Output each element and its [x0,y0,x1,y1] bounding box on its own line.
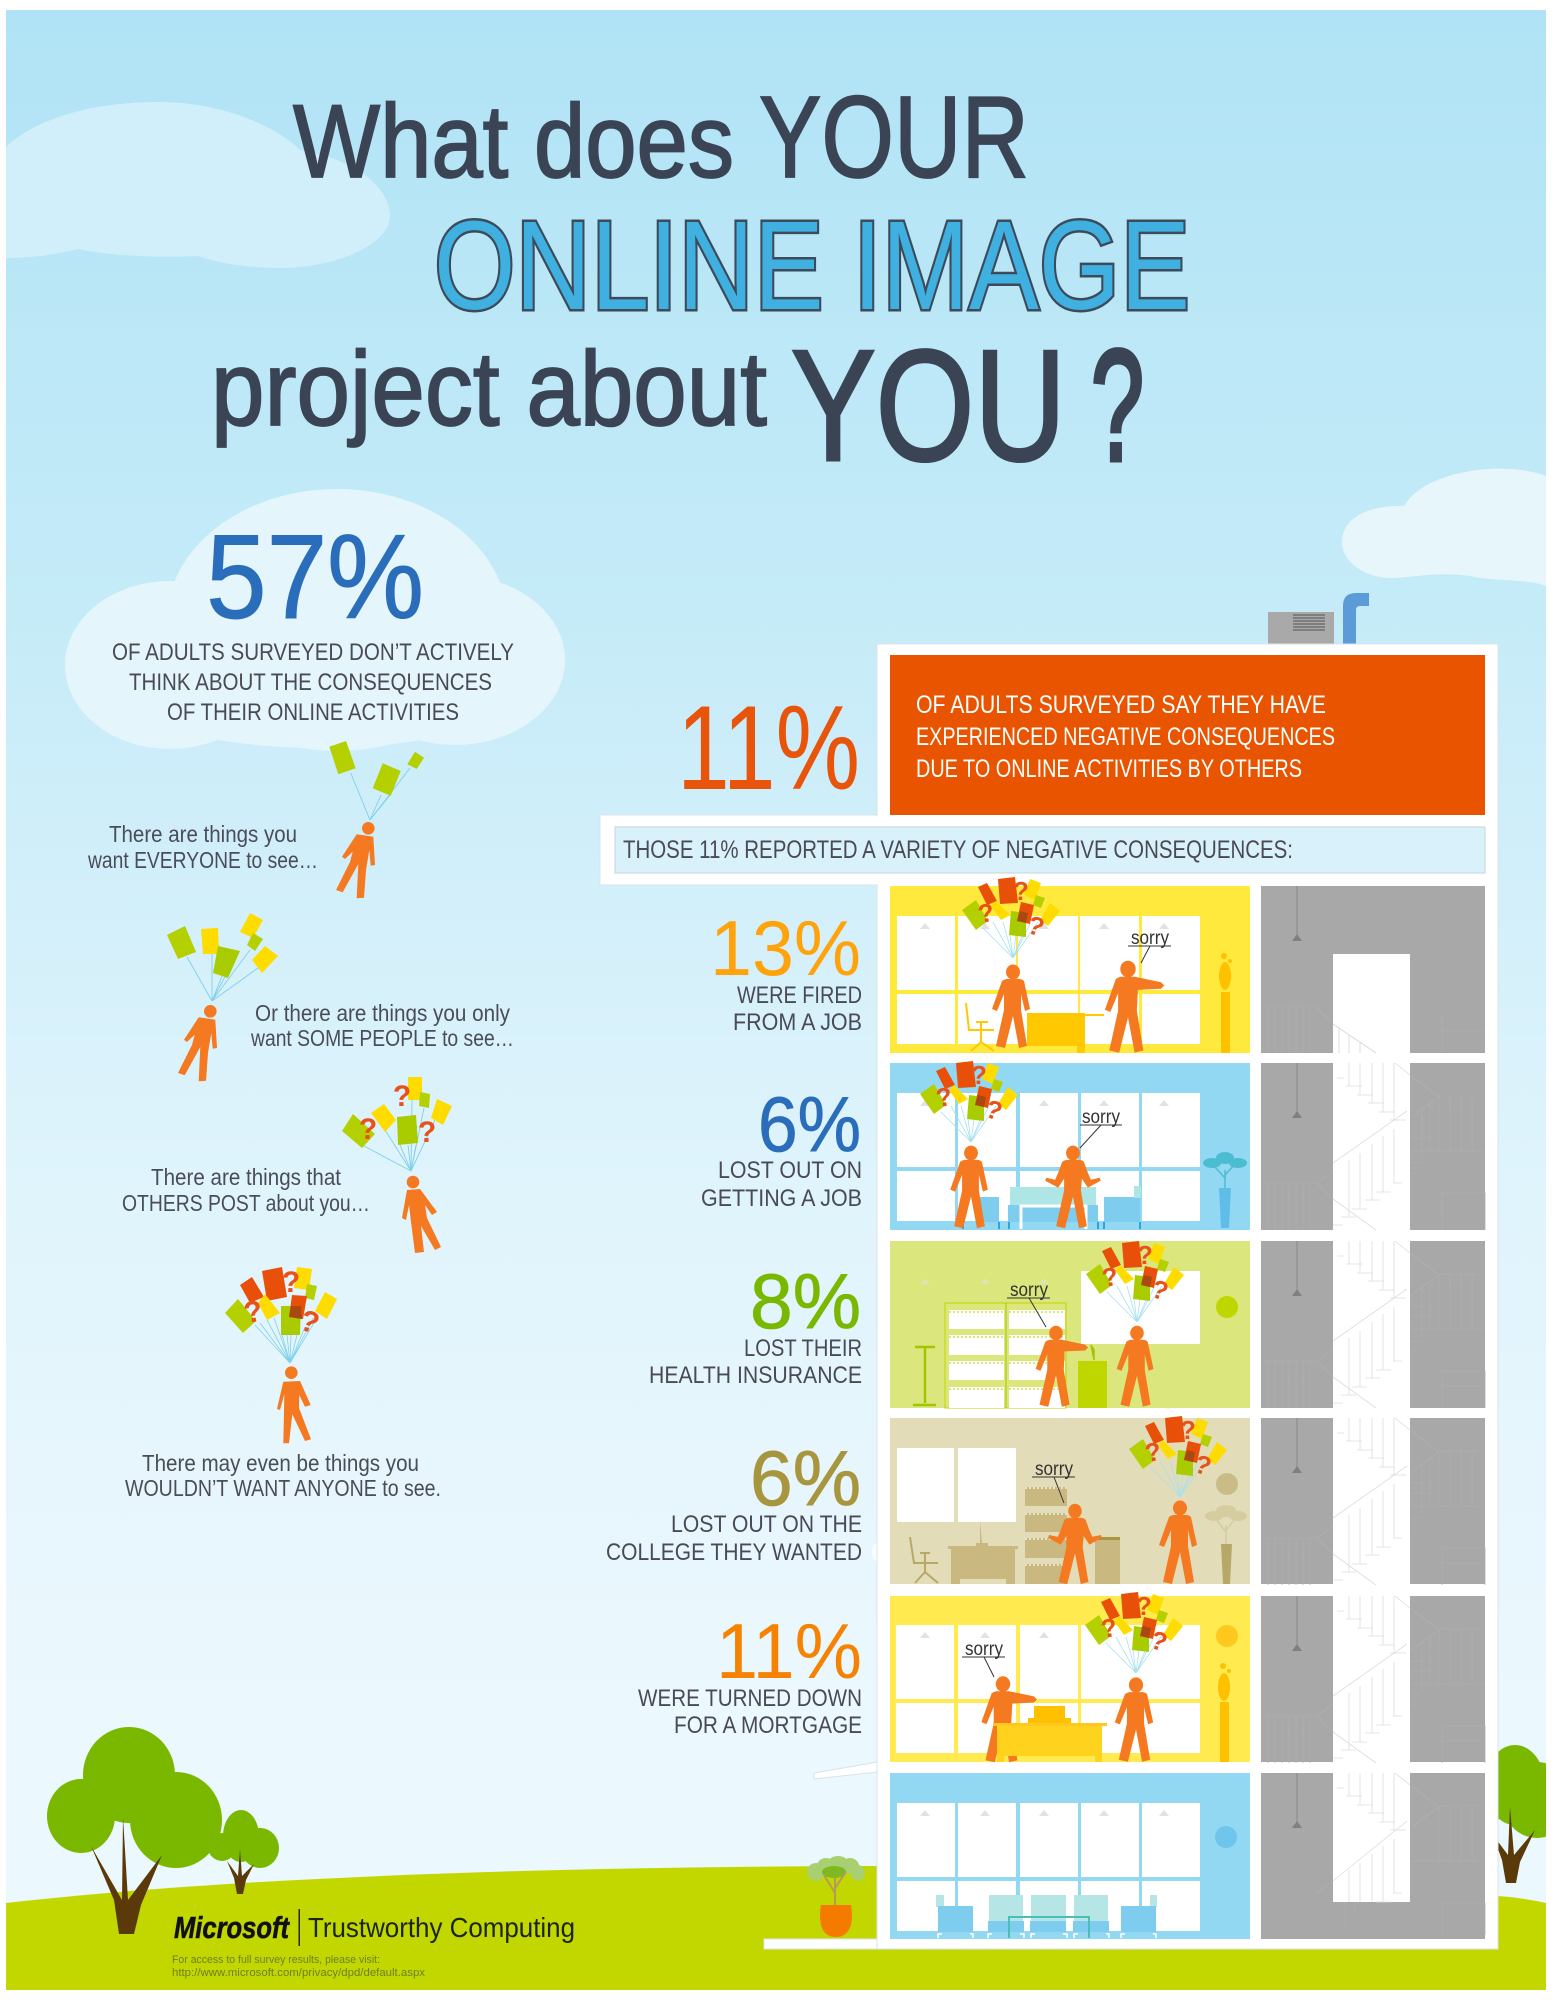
stat: 8% insurance: 8% [750,1257,861,1345]
stair floor 2 [1261,1063,1485,1230]
lounge furniture [963,1186,1141,1229]
stat: 11% mortgage [638,1607,862,1739]
room 1: fired [890,876,1250,1053]
cloud shape [65,489,565,751]
stat: 11% mortgage: 11% [716,1607,862,1695]
title: ONLINE IMAGE [434,195,1190,336]
cloud: top right [1342,469,1546,586]
room 5: mortgage [890,1591,1250,1762]
desk [1027,1013,1104,1053]
person shrugging [1045,1146,1101,1228]
text: others post: There are things that [151,1164,342,1190]
person looking [1117,1326,1153,1407]
stat: 8% insurance: HEALTH INSURANCE [649,1362,862,1389]
balloons of things: ? [1191,1448,1215,1482]
person pointing [981,1676,1037,1762]
banner: variety of consequences [615,827,1485,873]
text: everyone [87,821,318,873]
stat: 6% college [606,1434,862,1566]
desk and monitor [993,1706,1107,1762]
text: nobody [125,1450,441,1501]
title: What does [293,84,734,200]
stat: 8% insurance: LOST THEIR [744,1335,862,1362]
panel: 57% cloud [65,489,565,751]
balloons of things: ? [934,1081,954,1113]
balloons of things [1086,1240,1184,1322]
balloons of things: ? [1100,1261,1120,1293]
figure 4: nobody: ? [241,1295,265,1330]
stair floor 3 [1261,1241,1485,1408]
title: project about [211,330,767,448]
stair floor 4 [1261,1418,1485,1585]
text: others post: OTHERS POST about you… [122,1190,370,1216]
stat: 13% fired: FROM A JOB [733,1009,862,1036]
plant [1205,1505,1247,1584]
logo: Microsoft Trustworthy Computing: Microsoft [174,1910,290,1945]
cloud caption: OF ADULTS SURVEYED DON’T ACTIVELY [112,639,514,666]
heading panel: 11% [677,655,1485,815]
balloons of things: ? [1148,1273,1172,1307]
cube and plant [1078,1345,1107,1408]
stat: 11% mortgage: WERE TURNED DOWN [638,1685,862,1712]
person shrugging [1048,1504,1102,1584]
balloons of things: ? [971,1060,987,1090]
chair [910,1537,938,1583]
fine print: http://www.microsoft.com/privacy/dpd/default.aspx [172,1967,426,1979]
wall clock [1216,1296,1238,1318]
balloons of things: ? [1180,1415,1196,1445]
rooftop equipment [1268,593,1369,645]
text: others post [122,1164,370,1216]
room 2: job [890,1060,1250,1230]
orange callout [890,655,1485,815]
balloons of things: ? [1024,909,1048,943]
balloons of things: ? [1147,1624,1171,1658]
potted plant [807,1856,865,1937]
cloud caption: THINK ABOUT THE CONSEQUENCES [129,669,492,696]
cloud: top left [6,102,390,268]
big tree [47,1727,222,1934]
figure 3: others post: ? [393,1080,411,1113]
callout text [916,691,1335,783]
figure 3: others post: ? [418,1116,436,1149]
callout text: DUE TO ONLINE ACTIVITIES BY OTHERS [916,755,1302,783]
balloons of things: ? [1137,1240,1153,1270]
callout text: OF ADULTS SURVEYED SAY THEY HAVE [916,691,1326,719]
balloons of things: ? [1013,876,1029,906]
person looking [992,964,1030,1048]
logo: Microsoft Trustworthy Computing [174,1909,575,1946]
shelves [1025,1487,1067,1584]
room 3: insurance [890,1240,1250,1408]
text: nobody: There may even be things you [142,1450,419,1476]
person pointing [1105,961,1164,1053]
text: some people: Or there are things you only [255,1000,510,1026]
sorry label [962,1639,1005,1677]
stat: 6% college: COLLEGE THEY WANTED [606,1539,862,1566]
balloons of things [1085,1591,1183,1673]
cloud caption: OF THEIR ONLINE ACTIVITIES [167,699,459,726]
building shell [600,644,1498,1949]
figure 4: nobody: ? [282,1266,300,1299]
stat: 6% college: LOST OUT ON THE [671,1511,862,1538]
wall clock [1216,1625,1238,1647]
floor lamp [913,1347,936,1405]
stat: 6% job: LOST OUT ON [718,1157,862,1184]
stat: 13% fired: WERE FIRED [737,982,862,1009]
title: ? [1091,318,1144,494]
balloons of things: ? [1099,1612,1119,1644]
callout text: EXPERIENCED NEGATIVE CONSEQUENCES [916,723,1335,751]
balloons of things: ? [1136,1591,1152,1621]
person pointing [1036,1326,1088,1407]
sorry label: sorry [1082,1107,1120,1128]
stat: 6% job: GETTING A JOB [701,1185,862,1212]
stat: 6% job [701,1080,862,1212]
person looking [1159,1500,1197,1584]
person looking [1115,1677,1153,1762]
ground hill [6,1866,1546,1990]
logo: Microsoft Trustworthy Computing: Trustworthy Computing [308,1912,575,1943]
wall clock [1215,1826,1237,1848]
room 4: college [890,1415,1250,1584]
figure 4: nobody [225,1266,337,1443]
balloons of things [1129,1415,1227,1497]
text: everyone: want EVERYONE to see… [87,847,318,873]
banner: variety of consequences: THOSE 11% REPORTED A VARIETY OF NEGATIVE CONSEQUENCES: [623,836,1293,864]
right tree [1498,1745,1546,1883]
figure 2: some people [167,913,278,1081]
person looking [950,1146,988,1228]
stair floor 5 [1261,1596,1485,1763]
vase [1219,953,1232,1053]
stat: 13% fired [710,904,862,1036]
desk [948,1520,1018,1584]
figure 4: nobody: ? [296,1304,323,1341]
statistic 11%: 11% [677,681,860,815]
balloons of things [962,876,1060,958]
faint white spot [872,1539,898,1565]
stat: 13% fired: 13% [710,904,861,992]
room 6: empty lounge [890,1773,1250,1939]
wall clock [1216,1473,1238,1495]
fine print [172,1954,426,1979]
stair floor 1 [1261,886,1485,1053]
stat: 11% mortgage: FOR A MORTGAGE [674,1712,862,1739]
stair floor 6 [1261,1773,1485,1939]
sorry label: sorry [965,1639,1003,1660]
balloons of things [920,1060,1018,1142]
title [211,72,1190,494]
text: nobody: WOULDN’T WANT ANYONE to see. [125,1475,441,1501]
sorry label [1032,1459,1075,1503]
stairwell column [1261,886,1485,1939]
statistic 57%: 57% [206,510,424,644]
lounge seats [936,1895,1157,1938]
small tree [208,1810,279,1894]
balloons of things: ? [1143,1436,1163,1468]
stat: 6% college: 6% [750,1434,861,1522]
cabinet [1093,1537,1120,1584]
fine print: For access to full survey results, please visit: [172,1954,380,1966]
text: everyone: There are things you [109,821,297,847]
shelves [945,1303,1066,1408]
sorry label: sorry [1131,928,1169,949]
title: YOU [791,318,1066,494]
sorry label [1128,928,1171,963]
sorry label [1007,1280,1050,1327]
balloons of things: ? [976,897,996,929]
sorry label: sorry [1010,1280,1048,1301]
title: YOUR [759,72,1029,202]
stat: 8% insurance [649,1257,862,1389]
sorry label: sorry [1035,1459,1073,1480]
chair [966,1003,994,1051]
figure 3: others post [342,1077,452,1253]
vase [1218,1663,1231,1762]
text: some people: want SOME PEOPLE to see… [250,1025,514,1051]
stat: 6% job: 6% [758,1080,861,1168]
cloud caption [112,639,514,726]
plant [1203,1152,1247,1228]
figure 1: everyone [329,741,424,898]
sorry label [1080,1107,1122,1148]
figure 3: others post: ? [359,1113,377,1146]
balloons of things: ? [982,1093,1006,1127]
text: some people [250,1000,514,1051]
